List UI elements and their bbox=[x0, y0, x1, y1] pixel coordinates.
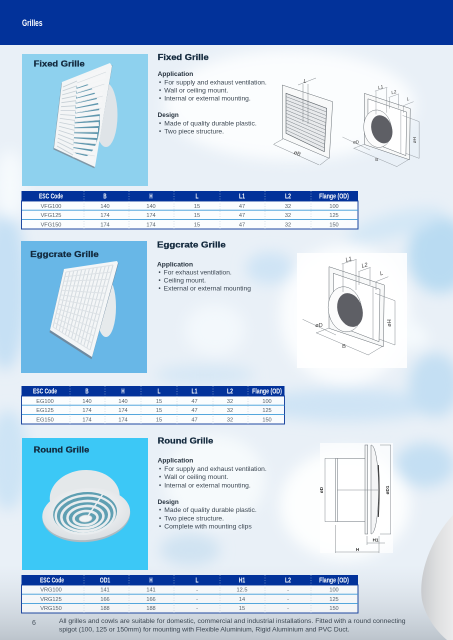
table: round grille sizes: 141 bbox=[146, 588, 156, 594]
table: round grille sizes: - bbox=[287, 597, 289, 603]
table: eggcrate grille sizes: 100 bbox=[262, 399, 272, 405]
table: fixed grille sizes: VFG100 bbox=[41, 204, 61, 210]
diagram: fixed grille rear view: L1 bbox=[377, 84, 384, 90]
table: round grille sizes: 12.5 bbox=[237, 588, 247, 594]
table: fixed grille sizes: H bbox=[149, 194, 153, 201]
table: fixed grille sizes: 32 bbox=[285, 213, 291, 219]
table: round grille sizes bbox=[22, 575, 358, 613]
table: round grille sizes: VRG125 bbox=[40, 597, 62, 603]
text: fixed grille description: Fixed Grille bbox=[158, 52, 209, 62]
table: eggcrate grille sizes: EG125 bbox=[36, 408, 54, 414]
table: fixed grille sizes: 47 bbox=[239, 213, 245, 219]
text: fixed grille description: Application bbox=[158, 71, 193, 78]
panel: fixed grille photo bbox=[22, 54, 148, 186]
table: round grille sizes: 125 bbox=[329, 597, 339, 603]
table: round grille sizes: - bbox=[196, 606, 198, 612]
table: fixed grille sizes: L1 bbox=[239, 194, 245, 201]
text: eggcrate grille description: External or external mounting bbox=[164, 286, 251, 293]
table: round grille sizes: 14 bbox=[239, 597, 245, 603]
page number: 6 bbox=[32, 620, 36, 627]
table: eggcrate grille sizes: Flange (OD) bbox=[252, 389, 282, 396]
panel: round grille photo bbox=[22, 438, 148, 570]
table: fixed grille sizes: 32 bbox=[285, 204, 291, 210]
diagram: fixed grille front view: øB bbox=[293, 150, 302, 158]
table: eggcrate grille sizes: EG100 bbox=[36, 399, 54, 405]
table: fixed grille sizes: VFG125 bbox=[41, 213, 61, 219]
table: eggcrate grille sizes: 140 bbox=[82, 399, 92, 405]
table: fixed grille sizes: 150 bbox=[329, 222, 339, 228]
text: fixed grille description: • bbox=[159, 80, 161, 86]
table: fixed grille sizes bbox=[22, 191, 358, 229]
footer note: All grilles and cowls are suitable for domestic, commercial and industrial installations. Fitted with a round connecting bbox=[59, 618, 406, 625]
text: fixed grille description: Internal or external mounting. bbox=[164, 95, 251, 102]
section title: Grilles bbox=[22, 18, 42, 28]
text: fixed grille description: Made of quality durable plastic. bbox=[164, 120, 257, 127]
footer note: spigot (100, 125 or 150mm) for mounting with Flexible Aluminium, Rigid Aluminium and PVC Duct. bbox=[59, 626, 350, 633]
fixed grille product bbox=[53, 63, 118, 168]
round grille product bbox=[39, 466, 132, 546]
table: round grille sizes: 100 bbox=[329, 588, 339, 594]
diagram: eggcrate grille: L bbox=[379, 271, 384, 277]
text: round grille description: For supply and exhaust ventilation. bbox=[164, 466, 267, 473]
table: eggcrate grille sizes: B bbox=[85, 389, 89, 396]
text: fixed grille description: Two piece structure. bbox=[164, 128, 224, 135]
table: fixed grille sizes: 15 bbox=[194, 222, 200, 228]
text: eggcrate grille description: Ceiling mount. bbox=[164, 278, 206, 285]
text: round grille description: Application bbox=[158, 458, 193, 465]
table: fixed grille sizes: L2 bbox=[285, 194, 291, 201]
text: round grille description: Design bbox=[158, 499, 179, 506]
table: round grille sizes: - bbox=[196, 588, 198, 594]
table: eggcrate grille sizes: 125 bbox=[262, 408, 272, 414]
text: fixed grille description: Design bbox=[158, 112, 179, 119]
text: eggcrate grille description bbox=[157, 239, 251, 293]
diagram: eggcrate grille: L1 bbox=[345, 256, 353, 264]
diagram: round grille side view: H bbox=[356, 547, 360, 552]
text: round grille description: Wall or ceiling mount. bbox=[164, 474, 229, 481]
table: round grille sizes: 166 bbox=[146, 597, 156, 603]
text: round grille description: • bbox=[159, 474, 161, 481]
table: fixed grille sizes: L bbox=[196, 194, 199, 201]
table: eggcrate grille sizes: 174 bbox=[82, 417, 92, 423]
table: round grille sizes: Flange (OD) bbox=[319, 578, 349, 585]
table: round grille sizes: - bbox=[287, 606, 289, 612]
table: eggcrate grille sizes: 174 bbox=[118, 417, 128, 423]
diagram: fixed grille rear view: øD bbox=[353, 139, 360, 144]
table: fixed grille sizes: 140 bbox=[146, 204, 156, 210]
table: fixed grille sizes: 15 bbox=[194, 204, 200, 210]
table: round grille sizes: 188 bbox=[146, 606, 156, 612]
table: round grille sizes: VRG100 bbox=[40, 588, 62, 594]
table: eggcrate grille sizes: H bbox=[121, 389, 125, 396]
table: round grille sizes: 15 bbox=[239, 606, 245, 612]
table: round grille sizes: 188 bbox=[100, 606, 110, 612]
diagram: eggcrate grille: øD bbox=[315, 323, 323, 329]
text: round grille description bbox=[158, 436, 267, 530]
text: eggcrate grille description: • bbox=[158, 278, 161, 285]
text: fixed grille description: • bbox=[159, 120, 161, 127]
diagram: eggcrate grille: L2 bbox=[361, 262, 369, 270]
table: round grille sizes: VRG150 bbox=[40, 606, 62, 612]
text: round grille description: Two piece structure. bbox=[164, 515, 224, 522]
text: eggcrate grille description: • bbox=[158, 269, 161, 276]
table: eggcrate grille sizes: 15 bbox=[156, 417, 162, 423]
table: round grille sizes: L2 bbox=[285, 578, 291, 585]
table: eggcrate grille sizes: EG150 bbox=[36, 417, 54, 423]
table: eggcrate grille sizes: 174 bbox=[118, 408, 128, 414]
table: round grille sizes: 141 bbox=[100, 588, 110, 594]
text: round grille description: • bbox=[159, 515, 161, 522]
text: fixed grille description: For supply and exhaust ventilation. bbox=[164, 80, 267, 86]
text: fixed grille description: Wall or ceiling mount. bbox=[164, 87, 229, 94]
table: eggcrate grille sizes: 47 bbox=[191, 408, 198, 414]
sphere decoration bbox=[421, 515, 453, 640]
text: round grille description: • bbox=[159, 507, 161, 514]
table: fixed grille sizes: 100 bbox=[329, 204, 339, 210]
table: fixed grille sizes: 125 bbox=[329, 213, 339, 219]
diagram: round grille side view bbox=[319, 443, 393, 553]
diagram: fixed grille rear view: øH bbox=[412, 137, 417, 143]
table: eggcrate grille sizes: 32 bbox=[227, 399, 233, 405]
diagram: fixed grille front view: L bbox=[303, 79, 307, 85]
table: eggcrate grille sizes: L2 bbox=[227, 389, 233, 396]
table: eggcrate grille sizes: L bbox=[158, 389, 161, 396]
table: eggcrate grille sizes: 32 bbox=[227, 408, 233, 414]
table: fixed grille sizes: 47 bbox=[239, 222, 245, 228]
table: fixed grille sizes: 174 bbox=[146, 222, 156, 228]
diagram: fixed grille rear view: L2 bbox=[391, 89, 397, 95]
diagram: eggcrate grille: øH bbox=[387, 319, 393, 327]
table: eggcrate grille sizes: 140 bbox=[118, 399, 128, 405]
table: eggcrate grille sizes: 150 bbox=[262, 417, 272, 423]
table: fixed grille sizes: 174 bbox=[146, 213, 156, 219]
panel title: Eggcrate Grille bbox=[30, 249, 99, 259]
table: eggcrate grille sizes: 32 bbox=[227, 417, 233, 423]
table: round grille sizes: H1 bbox=[239, 578, 245, 585]
header band bbox=[0, 0, 453, 45]
table: eggcrate grille sizes: 15 bbox=[156, 408, 162, 414]
text: round grille description: • bbox=[159, 523, 161, 530]
diagram: eggcrate grille: B bbox=[342, 344, 346, 350]
table: eggcrate grille sizes bbox=[22, 386, 284, 424]
text: round grille description: Complete with mounting clips bbox=[164, 523, 252, 530]
table: round grille sizes: H bbox=[149, 578, 153, 585]
table: round grille sizes: OD1 bbox=[100, 578, 110, 585]
table: fixed grille sizes: 32 bbox=[285, 222, 291, 228]
text: eggcrate grille description: • bbox=[158, 286, 161, 293]
text: eggcrate grille description: For exhaust ventilation. bbox=[164, 269, 232, 276]
table: fixed grille sizes: 15 bbox=[194, 213, 200, 219]
text: round grille description: • bbox=[159, 482, 161, 489]
text: fixed grille description: • bbox=[159, 128, 161, 135]
text: round grille description: Made of quality durable plastic. bbox=[164, 507, 257, 514]
panel title: Round Grille bbox=[34, 444, 90, 454]
diagram: round grille side view: øD bbox=[319, 486, 324, 493]
text: round grille description: • bbox=[159, 466, 161, 473]
table: eggcrate grille sizes: 174 bbox=[82, 408, 92, 414]
text: round grille description: Internal or external mounting. bbox=[164, 482, 251, 489]
table: eggcrate grille sizes: L1 bbox=[192, 389, 198, 396]
text: eggcrate grille description: Application bbox=[157, 261, 193, 268]
table: round grille sizes: 166 bbox=[100, 597, 110, 603]
table: fixed grille sizes: ESC Code bbox=[39, 194, 63, 201]
table: fixed grille sizes: VFG150 bbox=[41, 222, 61, 228]
table: fixed grille sizes: 174 bbox=[100, 222, 110, 228]
table: round grille sizes: 150 bbox=[329, 606, 339, 612]
table: eggcrate grille sizes: ESC Code bbox=[33, 389, 57, 396]
panel title: Fixed Grille bbox=[34, 59, 85, 69]
footer note bbox=[59, 618, 406, 633]
panel: eggcrate grille photo bbox=[21, 241, 147, 373]
diagram: fixed grille rear view bbox=[342, 84, 419, 167]
diagram: fixed grille front view bbox=[273, 78, 333, 165]
table: round grille sizes: L bbox=[196, 578, 199, 585]
table: eggcrate grille sizes: 47 bbox=[191, 399, 198, 405]
table: fixed grille sizes: Flange (OD) bbox=[319, 194, 349, 201]
diagram: round grille side view: H1 bbox=[373, 538, 379, 542]
text: fixed grille description: • bbox=[159, 87, 161, 94]
diagram: fixed grille rear view: B bbox=[375, 157, 378, 162]
table: round grille sizes: - bbox=[196, 597, 198, 603]
table: fixed grille sizes: 140 bbox=[100, 204, 110, 210]
diagram: eggcrate grille bbox=[297, 253, 407, 368]
diagram: fixed grille rear view: L bbox=[406, 96, 410, 102]
table: fixed grille sizes: 47 bbox=[239, 204, 245, 210]
text: eggcrate grille description: Eggcrate Grille bbox=[157, 239, 226, 249]
table: round grille sizes: - bbox=[287, 588, 289, 594]
text: fixed grille description bbox=[158, 52, 267, 135]
table: eggcrate grille sizes: 15 bbox=[156, 399, 162, 405]
table: fixed grille sizes: B bbox=[103, 194, 107, 201]
text: fixed grille description: • bbox=[159, 95, 161, 102]
table: fixed grille sizes: 174 bbox=[100, 213, 110, 219]
eggcrate grille product bbox=[50, 261, 118, 359]
table: eggcrate grille sizes: 47 bbox=[191, 417, 198, 423]
text: round grille description: Round Grille bbox=[158, 436, 214, 446]
diagram: round grille side view: øD1 bbox=[385, 485, 390, 494]
table: round grille sizes: ESC Code bbox=[40, 578, 64, 585]
